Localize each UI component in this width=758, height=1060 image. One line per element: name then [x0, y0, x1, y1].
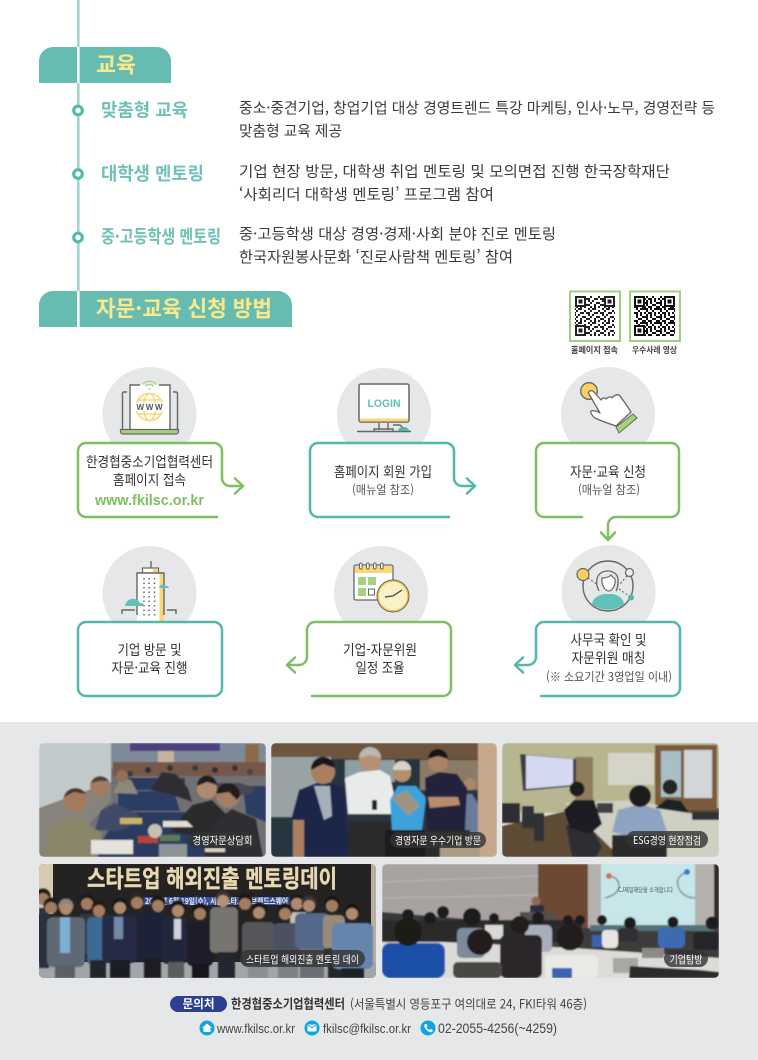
step 6: company visit: [78, 546, 222, 696]
email: fkilsc@fkilsc.or.kr: [323, 1021, 412, 1036]
bullet: [74, 233, 82, 242]
photo: visit to best-practice company: [271, 743, 497, 857]
step text: www.fkilsc.or.kr: [94, 492, 204, 509]
icon: laptop with globe: WWW: [136, 403, 163, 412]
step text: (매뉴얼 참조): [352, 481, 414, 498]
QR caption: 홈페이지 접속: [571, 344, 618, 356]
caption: ESG경영 현장점검: [633, 833, 701, 848]
icon: pointing hand: [561, 367, 655, 461]
photo: company tour seminar: [382, 864, 719, 978]
timeline vertical line: [77, 0, 80, 292]
bullet: [74, 170, 82, 178]
education item: 중·고등학생 멘토링: [74, 223, 556, 267]
step text: 홈페이지 접속: [113, 470, 186, 490]
icon: mail: [304, 1020, 320, 1036]
step text: 기업 방문 및: [118, 640, 182, 660]
step box with arrow: [310, 443, 474, 517]
item description: [239, 97, 715, 141]
contact badge: [170, 995, 227, 1012]
address: (서울특별시 영등포구 여의대로 24, FKI타워 46층): [350, 994, 587, 1012]
step text: [546, 630, 672, 685]
item label: 중·고등학생 멘토링: [101, 223, 221, 249]
item label: 맞춤형 교육: [101, 96, 188, 122]
icon: laptop with globe: [102, 367, 196, 461]
icon: calendar and clock: [334, 546, 428, 640]
website: www.fkilsc.or.kr: [216, 1021, 296, 1036]
heading: 자문·교육 신청 방법: 자문·교육 신청 방법: [96, 292, 272, 324]
step text: 자문위원 매칭: [572, 648, 646, 668]
step box with arrow: [516, 622, 680, 696]
item description: 맞춤형 교육 제공: [239, 120, 342, 141]
heading: 교육: [39, 47, 171, 83]
front row heads: [44, 898, 58, 912]
icon: login monitor: [337, 368, 431, 462]
education item: 맞춤형 교육: [74, 96, 715, 141]
step box with arrow: [536, 443, 679, 539]
step 2: member sign-up: [310, 368, 475, 517]
step text: (매뉴얼 참조): [578, 481, 640, 498]
step text: [343, 640, 417, 678]
QR caption: 우수사례 영상: [632, 344, 677, 356]
icon: office building: [102, 546, 196, 640]
step text: 사무국 확인 및: [570, 630, 646, 650]
step text: [112, 640, 188, 678]
step text: [86, 452, 213, 509]
step text: 자문·교육 신청: [570, 462, 646, 482]
item description: [239, 223, 556, 267]
step box with arrow: [78, 443, 243, 517]
photo: startup overseas mentoring day: 2024년 6월 19일(수), 서울 스타트업 브랜드스퀘어: [145, 896, 288, 907]
step text: 자문·교육 진행: [112, 658, 188, 678]
step 5: schedule coordination: [287, 546, 451, 696]
step text: 한경협중소기업협력센터: [86, 452, 213, 472]
front row bodies: [47, 917, 85, 967]
QR code: homepage: [570, 292, 620, 356]
caption: 스타트업 해외진출 멘토링 데이: [246, 952, 359, 967]
photo screen text: CJ제일제당을 소개합니다: [618, 884, 673, 894]
step box with arrow: [288, 622, 451, 696]
heading: 자문·교육 신청 방법: [39, 291, 292, 327]
QR code: best case video: [630, 292, 680, 356]
item description: [239, 160, 670, 204]
item description: 기업 현장 방문, 대학생 취업 멘토링 및 모의면접 진행 한국장학재단: [239, 160, 670, 182]
item description: 중·고등학생 대상 경영·경제·사회 분야 진로 멘토링: [239, 223, 556, 244]
step text: 기업-자문위원: [343, 640, 417, 660]
step text: [334, 462, 432, 498]
photo: ESG management on-site check: [502, 743, 719, 857]
icon: login monitor: LOGIN: [368, 398, 401, 410]
contact: web, mail, phone row: [200, 1020, 557, 1036]
item description: 중소·중견기업, 창업기업 대상 경영트렌드 특강 마케팅, 인사·노무, 경영전략 등: [239, 97, 715, 118]
contact: address row: [170, 994, 587, 1012]
item description: 한국자원봉사문화 ‘진로사람책 멘토링’ 참여: [239, 246, 513, 267]
caption: 경영자문상담회: [192, 833, 252, 848]
caption: 경영자문 우수기업 방문: [395, 833, 481, 848]
step 4: secretariat matching: [515, 545, 680, 696]
step 1: homepage access: [78, 367, 243, 517]
photo: startup overseas mentoring day: [36, 859, 376, 978]
icon: phone: [420, 1020, 436, 1036]
step text: (※ 소요기간 3영업일 이내): [546, 668, 672, 685]
icon: person with nodes: [562, 545, 656, 639]
organization name: 한경협중소기업협력센터: [231, 994, 345, 1012]
step text: 일정 조율: [356, 658, 405, 678]
phone number: 02-2055-4256(~4259): [438, 1020, 557, 1036]
heading: 교육: 교육: [96, 48, 136, 80]
step 3: apply: [536, 367, 679, 540]
item description: ‘사회리더 대학생 멘토링’ 프로그램 참여: [239, 184, 494, 204]
step box: [78, 622, 222, 696]
education item: 대학생 멘토링: [74, 160, 670, 204]
step text: 홈페이지 회원 가입: [334, 462, 432, 482]
photo: management consulting fair: [39, 743, 266, 857]
item label: 대학생 멘토링: [101, 160, 204, 186]
photo banner text: 스타트업 해외진출 멘토링데이: [87, 859, 337, 894]
icon: home: [200, 1020, 214, 1036]
contact badge: 문의처: [182, 995, 214, 1012]
back row: [39, 908, 49, 968]
bullet: [74, 106, 82, 115]
panel: gallery and contact: [0, 722, 758, 1060]
step text: [570, 462, 646, 498]
caption: 기업탐방: [670, 952, 703, 967]
